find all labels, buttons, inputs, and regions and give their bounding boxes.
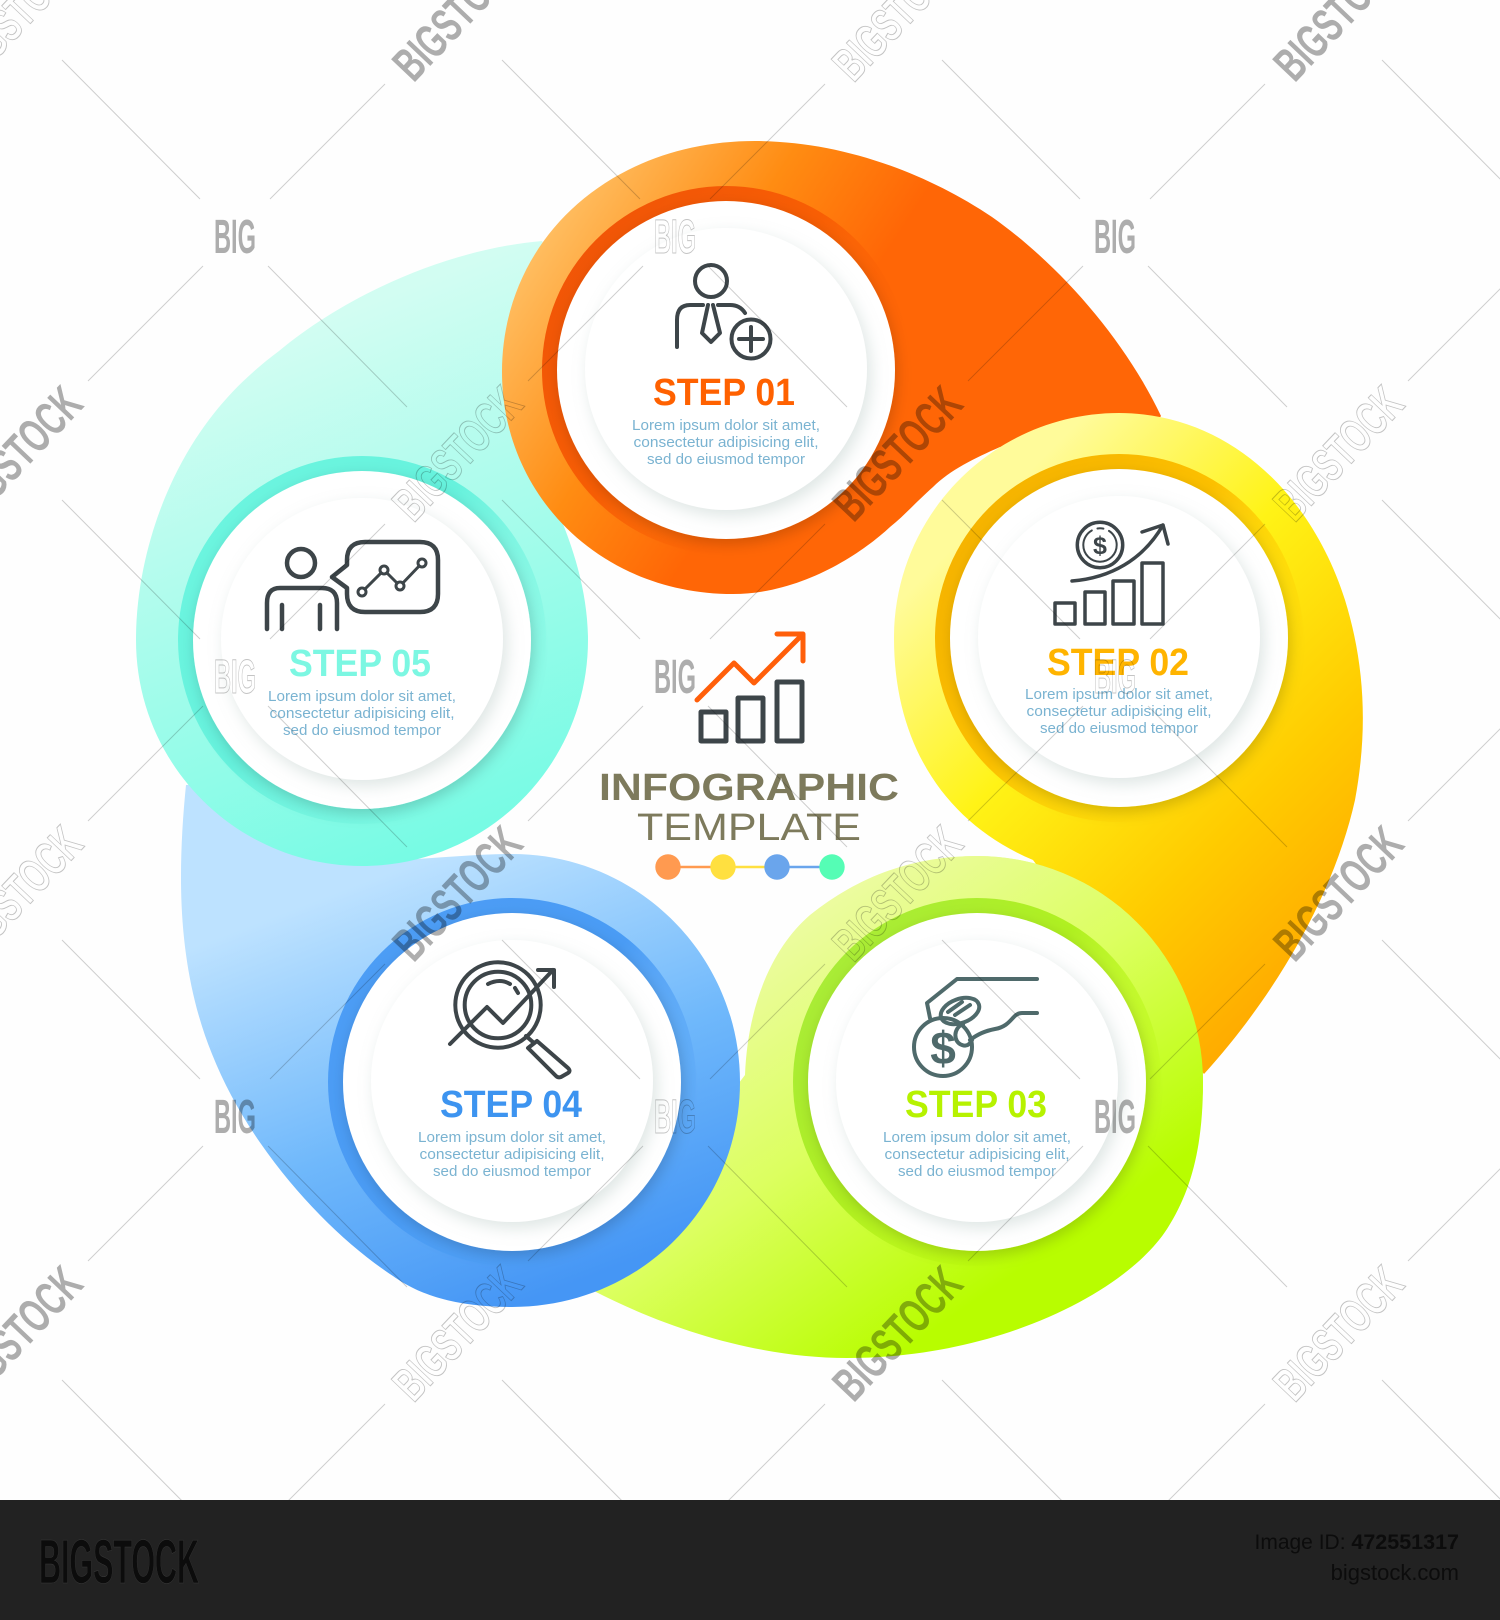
step heading: STEP 05 — [289, 643, 431, 685]
white disc — [193, 471, 531, 809]
ring — [935, 454, 1303, 822]
step text: sed do eiusmod tempor — [433, 1163, 591, 1180]
inner disc — [221, 498, 503, 780]
step text: sed do eiusmod tempor — [283, 722, 441, 739]
step text — [418, 1129, 606, 1180]
inner disc — [836, 940, 1118, 1222]
title: INFOGRAPHIC — [599, 767, 899, 809]
watermark: BIGSTOCK — [823, 1257, 973, 1411]
subtitle: TEMPLATE — [637, 807, 861, 849]
step text: consectetur adipisicing elit, — [270, 705, 454, 722]
watermark: BIGSTOCK — [383, 377, 533, 531]
footer bar: BIGSTOCK — [39, 1528, 199, 1597]
step text: sed do eiusmod tempor — [1040, 720, 1198, 737]
icon: hand with coin: $ — [930, 1022, 956, 1074]
icon: money growth chart — [1055, 522, 1168, 624]
step heading: STEP 02 — [1047, 642, 1189, 684]
white disc — [343, 913, 681, 1251]
footer url: bigstock.com — [1331, 1560, 1459, 1585]
icon: center bar chart — [697, 634, 803, 741]
step 04 panel — [328, 898, 696, 1266]
watermark: BIG — [1094, 211, 1136, 264]
step text: Lorem ipsum dolor sit amet, — [883, 1129, 1071, 1146]
watermark: BIG — [654, 651, 696, 704]
step text: Lorem ipsum dolor sit amet, — [632, 417, 820, 434]
watermark: BIG — [1094, 651, 1136, 704]
step 05 panel — [178, 456, 546, 824]
step text: consectetur adipisicing elit, — [420, 1146, 604, 1163]
blob: step 05 teal — [136, 241, 600, 866]
icon: hand with coin — [914, 979, 1037, 1076]
step text: sed do eiusmod tempor — [647, 451, 805, 468]
inner disc — [978, 496, 1260, 778]
watermark: BIG — [1094, 1091, 1136, 1144]
step text — [632, 417, 820, 468]
blob: step 03 head overlap — [751, 856, 1203, 1308]
blob: step 04 blue — [181, 780, 740, 1307]
watermark: BIG — [214, 211, 256, 264]
white disc — [808, 913, 1146, 1251]
ring — [793, 898, 1161, 1266]
blob: step 01 orange — [502, 141, 1161, 594]
dot connector — [655, 854, 845, 880]
inner disc — [371, 940, 653, 1222]
step text: consectetur adipisicing elit, — [1026, 703, 1212, 720]
step heading: STEP 03 — [905, 1084, 1047, 1126]
step 02 panel — [935, 454, 1303, 822]
inner disc — [585, 228, 867, 510]
step 03 panel — [793, 898, 1161, 1266]
ring — [178, 456, 546, 824]
watermark: BIG — [654, 1091, 696, 1144]
step text: Lorem ipsum dolor sit amet, — [268, 688, 456, 705]
step text — [1025, 686, 1213, 737]
icon: money growth chart: $ — [1093, 532, 1107, 560]
step 01 panel — [542, 186, 910, 554]
step heading: STEP 04 — [440, 1084, 582, 1126]
image id: Image ID: 472551317 — [1254, 1530, 1459, 1554]
step text — [883, 1129, 1071, 1180]
watermark: BIGSTOCK — [1264, 1257, 1414, 1411]
ring — [542, 186, 910, 554]
watermark: BIG — [214, 651, 256, 704]
cycle blobs — [136, 141, 1363, 1358]
step heading: STEP 01 — [653, 372, 795, 414]
blob: step 03 green — [594, 856, 1203, 1358]
watermark: BIGSTOCK — [823, 377, 973, 531]
icon: presenter with chart bubble — [267, 542, 438, 629]
icon: person with plus — [677, 265, 770, 358]
step text: sed do eiusmod tempor — [898, 1163, 1056, 1180]
step text: consectetur adipisicing elit, — [634, 434, 818, 451]
watermark: BIG — [654, 211, 696, 264]
ring — [328, 898, 696, 1266]
watermark: BIG — [214, 1091, 256, 1144]
watermark: BIGSTOCK — [383, 817, 533, 971]
footer bar — [0, 1500, 1500, 1620]
step text: consectetur adipisicing elit, — [884, 1146, 1070, 1163]
step text — [268, 688, 456, 739]
white disc — [950, 469, 1288, 807]
watermark: BIGSTOCK — [1264, 377, 1414, 531]
white disc — [557, 201, 895, 539]
center title block — [599, 634, 899, 880]
icon: magnifier with trend — [450, 962, 570, 1077]
blob: step 02 yellow — [894, 413, 1363, 1074]
watermark: BIGSTOCK — [383, 1257, 533, 1411]
watermark: BIGSTOCK — [823, 817, 973, 971]
step text: Lorem ipsum dolor sit amet, — [418, 1129, 606, 1146]
step text: Lorem ipsum dolor sit amet, — [1025, 686, 1213, 703]
watermark: BIGSTOCK — [1264, 817, 1414, 971]
